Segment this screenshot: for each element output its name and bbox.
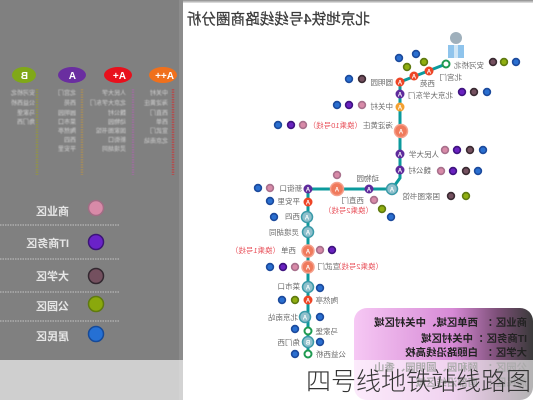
station: 新街口: A: [305, 188, 310, 194]
caption: 四号线地铁站线路图: [306, 368, 531, 396]
B station list: [11, 89, 35, 126]
station: 安河桥北: 安河桥北: [454, 60, 484, 70]
badge: B: B: [21, 71, 28, 82]
station: 中关村: 中关村: [370, 101, 393, 111]
badge: A++: [149, 67, 177, 83]
key row: university: [405, 346, 527, 359]
zone legend: [0, 200, 120, 343]
key row: residential: [415, 376, 527, 389]
station: 公益西桥: 公益西桥: [316, 349, 346, 359]
A++ station list: 中关村: [150, 89, 168, 97]
badge: A++: A++: [155, 71, 174, 82]
station: 新街口: [255, 183, 312, 194]
key row: park: 公园区 ：: [483, 362, 527, 374]
station: 陶然亭: A: [305, 298, 310, 304]
station: 北京南站: 北京南站: [268, 312, 298, 322]
badge: A+: [104, 67, 132, 83]
A++ station list: 北京南站: [144, 137, 168, 145]
A station list: 陶然亭: [58, 127, 76, 135]
station: 西四: [271, 212, 312, 222]
station: 魏公村: 魏公村: [408, 165, 431, 175]
title: 北京地铁4号线线路商圈分析: [187, 11, 370, 28]
station: 海淀黄庄: 海淀黄庄: [363, 120, 393, 130]
B station list: 安河桥北: [11, 89, 35, 97]
key row: residential: 南部沿线区域: [415, 376, 478, 389]
station: 海淀黄庄: A: [398, 130, 403, 136]
station: 宣武门: A: [305, 266, 310, 272]
station: 角门西: 角门西: [277, 337, 300, 347]
station: 圆明园: [346, 76, 404, 87]
station: 中关村: A: [397, 106, 402, 112]
key row: IT: [420, 332, 527, 345]
A++ station list: 西单: [156, 118, 168, 126]
A station list: [58, 89, 76, 153]
station: 海淀黄庄: [275, 120, 408, 138]
legend item: university: [36, 268, 104, 284]
A station list: 西四: [64, 137, 76, 144]
A++ station list: 西直门: [150, 109, 168, 117]
key row: IT: IT商务区 ：: [473, 332, 527, 345]
badge: B: [12, 67, 36, 83]
icon: person: [448, 32, 464, 58]
station: 魏公村: A: [397, 168, 402, 174]
A+ station list: 动物园: [108, 118, 126, 126]
A++ station list: 海淀黄庄: [144, 99, 168, 107]
legend item: IT: IT商务区: [26, 236, 69, 250]
station: 平安里: [267, 196, 312, 206]
A+ station list: 人民大学: [102, 89, 126, 97]
station: 陶然亭: [279, 295, 338, 305]
badge: A: A: [69, 71, 76, 82]
station: 北京大学东门: 北京大学东门: [408, 90, 453, 100]
station: 菜市口: [278, 281, 323, 292]
A station list: 平安里: [58, 145, 76, 153]
top edge strip: [183, 0, 533, 3]
A station list: 西苑: [64, 99, 76, 107]
station: 宣武门: [267, 261, 383, 273]
badge: A+: A+: [113, 71, 126, 82]
station: 国家图书馆: A: [389, 188, 394, 194]
station: 西直门: A: [334, 188, 339, 194]
station: 西单: [231, 245, 335, 257]
station: 动物园: [356, 173, 379, 194]
legend item: university: 大学区: [36, 269, 69, 283]
legend item: IT: [26, 234, 104, 250]
legend item: commercial: [36, 200, 104, 218]
B station list: 角门西: [17, 118, 35, 126]
key row: university: 大学区 ：: [483, 346, 527, 359]
station: 西单: （换乘1号线）: [231, 245, 280, 255]
station: 魏公村: [396, 165, 481, 175]
station: 陶然亭: 陶然亭: [315, 295, 338, 305]
A station list: 菜市口: [58, 118, 76, 126]
station: 西苑: 西苑: [420, 78, 435, 88]
station: 人民大学: A: [397, 152, 402, 158]
station: 灵境胡同: 灵境胡同: [269, 227, 299, 237]
station: 角门西: [277, 336, 323, 348]
station: 国家图书馆: 国家图书馆: [402, 191, 440, 201]
A+ station list: 灵境胡同: [102, 145, 126, 153]
station: 菜市口: 菜市口: [278, 281, 300, 291]
station: 宣武门: 宣武门: [318, 261, 340, 271]
key row: commercial: 商业区 ：: [483, 316, 527, 329]
station: 西直门: （换乘2号线）: [324, 205, 373, 215]
key row: park: 颐和园、圆明园、香山: [374, 361, 478, 374]
station: 中关村: [334, 101, 404, 112]
station: 西单: 西单: [281, 245, 296, 255]
B station list: 马家堡: [17, 109, 35, 117]
caption overlay band: [0, 360, 533, 400]
station: 北京大学东门: [396, 89, 490, 100]
station: 西单: A: [305, 250, 310, 256]
legend item: park: 公园区: [36, 300, 69, 313]
A station list: 北宫门: [58, 89, 76, 97]
B station list: 公益西桥: [11, 99, 35, 107]
station: 安河桥北: [442, 59, 519, 70]
metro line: [308, 64, 446, 354]
station: 西苑: [396, 55, 435, 88]
station: 动物园: 动物园: [356, 173, 379, 183]
station: 国家图书馆: [386, 184, 469, 201]
legend item: residential: 居民区: [36, 330, 69, 343]
station: 西苑: A: [411, 74, 416, 80]
station: 平安里: 平安里: [277, 196, 300, 206]
station: 灵境胡同: [269, 226, 314, 238]
station: 马家堡: 马家堡: [315, 326, 338, 336]
station: 西四: 西四: [285, 212, 300, 221]
station: 圆明园: A: [397, 80, 402, 86]
key row: commercial: [373, 316, 527, 329]
legend item: residential: [36, 326, 104, 343]
station: 宣武门: （换乘2号线）: [334, 261, 383, 271]
station: 人民大学: [396, 147, 486, 159]
station: 北京大学东门: A: [397, 92, 402, 98]
station: 人民大学: 人民大学: [409, 149, 439, 159]
legend item: park: [36, 296, 104, 313]
A station list: 圆明园: [58, 110, 76, 117]
panel: district key: [354, 308, 533, 400]
tier dotted lines: [37, 89, 173, 175]
station: 动物园: A: [366, 188, 371, 194]
legend item: commercial: 商业区: [36, 204, 69, 218]
station: 圆明园: 圆明园: [370, 78, 393, 87]
station: 北宫门: [413, 51, 462, 82]
A+ station list: 魏公村: [108, 109, 126, 117]
station: 北京南站: [268, 312, 323, 322]
station: 公益西桥: [292, 349, 346, 359]
station: 西直门: [324, 172, 394, 220]
tier badge columns: [11, 67, 177, 175]
key row: university: 白颐路沿线高校: [405, 346, 478, 359]
A++ station list: 宣武门: [150, 127, 168, 135]
A++ station list: [144, 89, 168, 145]
station: 西直门: 西直门: [342, 195, 364, 205]
key row: park: [374, 361, 527, 374]
station: 新街口: 新街口: [280, 183, 302, 193]
station: 灵境胡同: A: [305, 230, 310, 236]
station: 平安里: A: [305, 200, 310, 206]
station: 北宫门: 北宫门: [440, 72, 462, 82]
station: 海淀黄庄: （换乘10号线）: [309, 120, 362, 130]
station: 菜市口: A: [305, 286, 310, 292]
A+ station list: 新街口: [108, 136, 126, 144]
station: 西四: A: [304, 216, 309, 222]
A+ station list: 国家图书馆: [96, 127, 126, 135]
station: 马家堡: [292, 326, 338, 336]
badge: A: [58, 67, 86, 83]
A+ station list: [90, 89, 126, 153]
key row: IT: 中关村区域: [420, 332, 473, 345]
panel: left grey sidebar: [0, 0, 183, 400]
station: 角门西: B: [305, 340, 310, 346]
station: 北京南站: A: [302, 316, 307, 322]
A+ station list: 北京大学东门: [90, 99, 126, 107]
key row: residential: 居民区 ：: [483, 377, 527, 389]
key row: commercial: 西单区域、中关村区域: [373, 316, 478, 329]
station: 北宫门: A: [426, 70, 431, 76]
